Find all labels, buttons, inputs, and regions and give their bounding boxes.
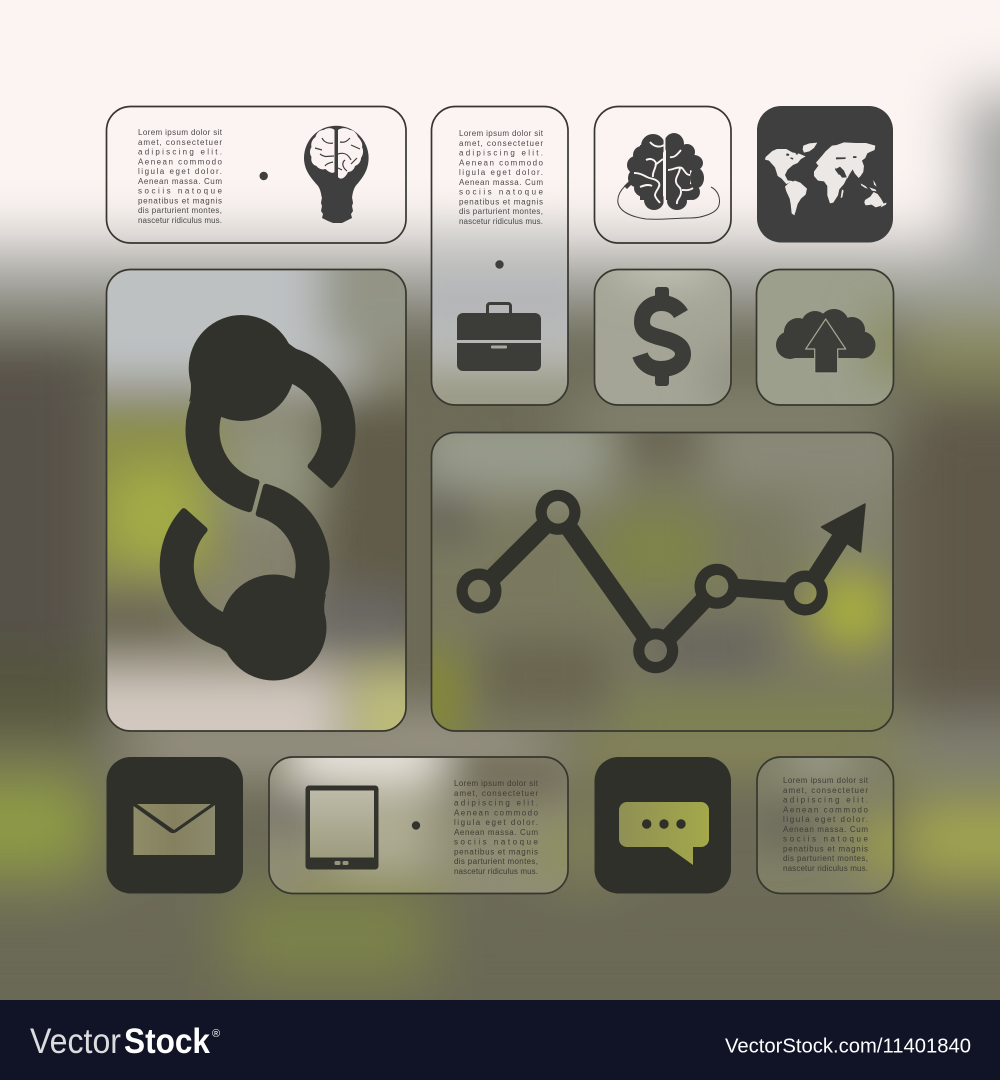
text block: idea: adipiscing elit. <box>138 148 222 156</box>
panel: brain with cable <box>594 106 731 243</box>
footer id: VectorStock.com/11401840 <box>725 1036 971 1058</box>
panel: growth chart <box>432 432 893 731</box>
text block: closing <box>783 776 869 873</box>
dot <box>412 821 420 830</box>
text block: closing: sociis natoque <box>783 834 869 844</box>
text block: tablet: ligula eget dolor. <box>454 818 538 827</box>
text block: idea <box>138 128 223 225</box>
text block: closing: penatibus et magnis <box>783 844 868 853</box>
text block: tablet: Lorem ipsum dolor sit <box>454 779 539 788</box>
icon: speech bubble <box>619 802 709 865</box>
text block: closing: nascetur ridiculus mus. <box>783 864 868 873</box>
text block: business: dis parturient montes, <box>459 207 543 216</box>
text block: closing: Lorem ipsum dolor sit <box>783 776 869 785</box>
text block: idea: ligula eget dolor. <box>138 167 222 176</box>
text block: business: nascetur ridiculus mus. <box>459 217 543 226</box>
icon: briefcase <box>457 302 541 371</box>
text block: closing: ligula eget dolor. <box>783 815 868 824</box>
icon: tablet <box>306 786 378 870</box>
text block: closing: amet, consectetuer <box>783 786 868 795</box>
panel: text only <box>757 757 894 894</box>
text block: tablet: Aenean massa. Cum <box>454 828 538 837</box>
text block: business: penatibus et magnis <box>459 197 543 206</box>
panel: handshake <box>106 270 406 731</box>
text block: closing: Aenean commodo <box>783 805 869 814</box>
text block: idea: penatibus et magnis <box>138 196 222 205</box>
panel: dollar <box>594 270 731 405</box>
text block: idea: sociis natoque <box>138 186 223 196</box>
text block: business: Lorem ipsum dolor sit <box>459 129 544 138</box>
text block: business: amet, consectetuer <box>459 139 543 148</box>
icon: dollar sign <box>640 287 683 386</box>
text block: tablet: sociis natoque <box>454 838 539 846</box>
text block: idea: Aenean massa. Cum <box>138 177 222 186</box>
text block: business <box>459 129 544 226</box>
text block: idea: nascetur ridiculus mus. <box>138 216 222 225</box>
text block: business: adipiscing elit. <box>459 148 543 158</box>
text block: closing: adipiscing elit. <box>783 796 868 804</box>
icon: envelope <box>134 804 215 855</box>
icon: cloud with arrow <box>776 309 876 373</box>
dot <box>495 260 504 269</box>
logo: VectorStock: Vector <box>30 1022 121 1061</box>
panel: mail <box>106 757 243 894</box>
dot <box>260 172 268 180</box>
footer bar <box>0 1000 1000 1080</box>
logo: VectorStock <box>30 1022 220 1061</box>
text block: closing: Aenean massa. Cum <box>783 825 868 834</box>
text block: tablet: amet, consectetuer <box>454 789 538 798</box>
text block: idea: Lorem ipsum dolor sit <box>138 128 223 137</box>
logo: VectorStock: ® <box>212 1028 220 1040</box>
text block: business: ligula eget dolor. <box>459 168 543 177</box>
panel: world map <box>757 106 893 242</box>
text block: tablet: Aenean commodo <box>454 808 539 817</box>
icon: world map <box>765 142 887 215</box>
panel: briefcase text <box>432 106 568 405</box>
panel backdrops: frosted glass <box>106 106 894 894</box>
text block: idea: amet, consectetuer <box>138 138 222 147</box>
panel: idea bulb <box>106 106 406 243</box>
text block: business: sociis natoque <box>459 188 544 196</box>
panel: cloud upload <box>756 270 894 405</box>
text block: business: Aenean commodo <box>459 158 544 167</box>
panel: chat <box>594 757 731 894</box>
logo: VectorStock: Stock <box>124 1022 210 1061</box>
text block: closing: dis parturient montes, <box>783 854 868 863</box>
text block: business: Aenean massa. Cum <box>459 178 543 187</box>
panel: tablet text <box>269 757 568 894</box>
text block: tablet: adipiscing elit. <box>454 798 538 808</box>
icon: brain with cable <box>618 133 720 219</box>
icon: light bulb with brain <box>304 126 369 223</box>
text block: tablet: nascetur ridiculus mus. <box>454 867 538 876</box>
icon: handshake rings <box>163 318 353 678</box>
text block: tablet <box>454 779 539 876</box>
text block: tablet: dis parturient montes, <box>454 857 538 866</box>
line chart with arrow <box>456 490 865 673</box>
text block: idea: Aenean commodo <box>138 157 223 166</box>
text block: idea: dis parturient montes, <box>138 206 222 215</box>
text block: tablet: penatibus et magnis <box>454 847 538 856</box>
